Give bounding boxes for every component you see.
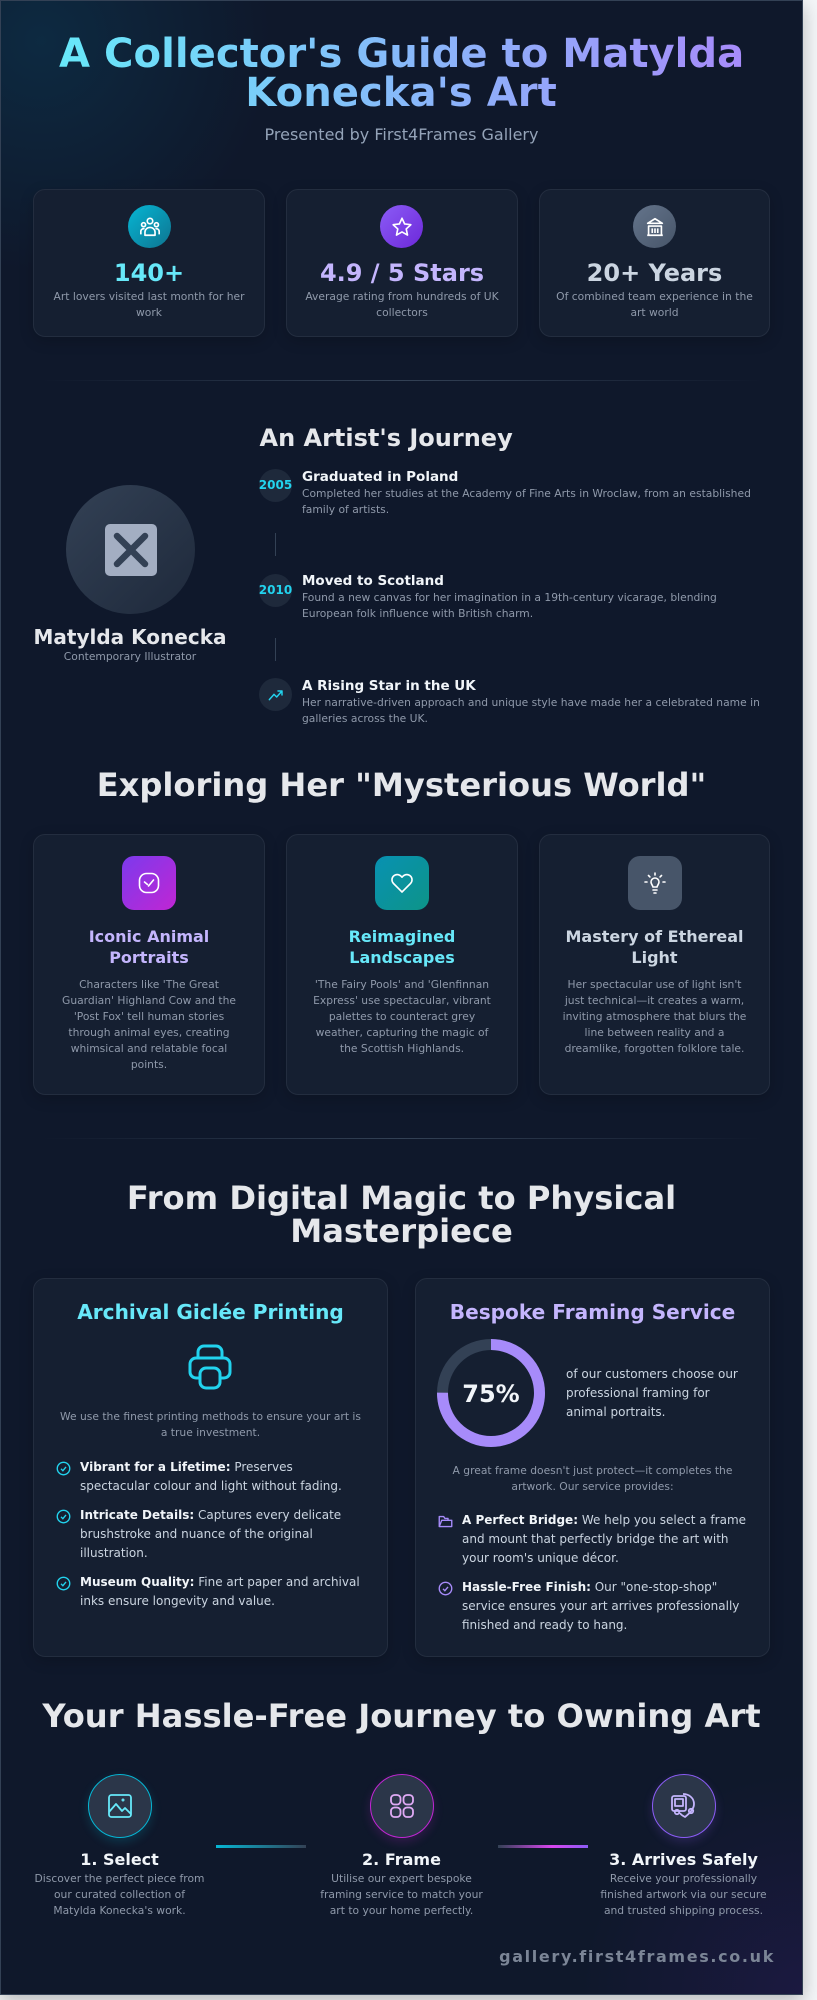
feature title: Iconic Animal <box>89 926 209 946</box>
step icon: grid <box>370 1774 434 1838</box>
event text: Found a new canvas for her imagination in a 19th-century vicarage, blending <box>302 591 717 604</box>
feature text: inviting atmosphere that blurs the <box>563 1010 746 1023</box>
footer url: gallery.first4frames.co.uk <box>499 1947 775 1966</box>
icon: people <box>128 205 171 248</box>
feature text <box>313 978 491 1055</box>
donut caption: of our customers choose our <box>566 1367 738 1381</box>
stat description: Of combined team experience in the <box>556 290 753 303</box>
feature text: whimsical and relatable focal <box>71 1042 227 1055</box>
stat value: 140+ <box>114 259 184 287</box>
list item: finish <box>438 1580 739 1632</box>
feature text: Characters like 'The Great <box>79 978 219 991</box>
event title: Moved to Scotland <box>302 573 444 589</box>
year 2010: 2010 <box>259 583 292 597</box>
icon: star <box>380 205 423 248</box>
list text <box>462 1580 739 1632</box>
connector 2 <box>498 1845 588 1848</box>
stat description: art world <box>630 306 679 319</box>
icon: bulb <box>628 856 682 910</box>
year 2005: 2005 <box>259 478 292 492</box>
artist portrait placeholder <box>66 485 195 614</box>
list text <box>80 1460 342 1493</box>
list text: finished and ready to hang. <box>462 1618 627 1632</box>
list text: A Perfect Bridge: We help you select a frame <box>462 1513 746 1527</box>
list item: details <box>56 1508 341 1560</box>
feature text: 'Post Fox' tell human stories <box>74 1010 224 1023</box>
feature text: Her spectacular use of light isn't <box>568 978 741 991</box>
panel intro: We use the finest printing methods to ensure your art is <box>60 1410 361 1423</box>
feature title: Mastery of Ethereal <box>566 926 744 946</box>
artist role: Contemporary Illustrator <box>64 650 196 663</box>
list text: Hassle-Free Finish: Our "one-stop-shop" <box>462 1580 717 1594</box>
stat description: Average rating from hundreds of UK <box>305 290 499 303</box>
donut caption: professional framing for <box>566 1386 710 1400</box>
title: A Collector's Guide to Matylda <box>59 31 744 77</box>
panel: framing service <box>415 1278 770 1657</box>
event text <box>302 487 751 516</box>
heading: digital to physical <box>127 1179 676 1250</box>
stat description <box>54 290 244 319</box>
step text: framing service to match your <box>320 1888 483 1901</box>
title <box>59 35 743 113</box>
stat card: rating <box>286 189 518 337</box>
feature card: animal portraits <box>33 834 265 1095</box>
timeline item rising star <box>259 678 760 725</box>
stat value: 20+ Years <box>587 259 722 287</box>
heading: mysterious world: Exploring Her "Mysterious World" <box>97 766 706 804</box>
panel intro: A great frame doesn't just protect—it completes the <box>453 1464 732 1477</box>
stat value: 4.9 / 5 Stars <box>320 259 484 287</box>
step text: Matylda Konecka's work. <box>53 1904 186 1917</box>
list item: bridge <box>438 1513 746 1565</box>
list item: vibrant <box>56 1460 342 1493</box>
feature text: Guardian' Highland Cow and the <box>62 994 236 1007</box>
connector 1 <box>216 1845 306 1848</box>
timeline item 2010 <box>259 573 717 620</box>
stat description <box>556 290 753 319</box>
stat card: visitors <box>33 189 265 337</box>
feature title: Landscapes <box>349 948 455 966</box>
list text: illustration. <box>80 1546 148 1560</box>
step 2 <box>320 1774 483 1917</box>
step text: and trusted shipping process. <box>604 1904 763 1917</box>
feature title: Reimagined <box>349 926 455 946</box>
heading: digital to physical: Masterpiece <box>290 1212 513 1250</box>
donut chart 75%: 75% <box>462 1380 520 1408</box>
step text: Receive your professionally <box>610 1872 757 1885</box>
feature text: through animal eyes, creating <box>68 1026 230 1039</box>
step text <box>320 1872 483 1917</box>
feature text: palettes to counteract grey <box>329 1010 475 1023</box>
marker 2010 <box>259 574 292 607</box>
stat description <box>305 290 499 319</box>
step icon: shipping <box>652 1774 716 1838</box>
feature title <box>349 926 455 966</box>
panel: giclee printing <box>33 1278 388 1657</box>
donut chart 75% <box>437 1339 545 1447</box>
list text: brushstroke and nuance of the original <box>80 1527 313 1541</box>
list text: Museum Quality: Fine art paper and archival <box>80 1575 360 1589</box>
list text <box>80 1575 360 1608</box>
step text: art to your home perfectly. <box>330 1904 473 1917</box>
step title: 3. Arrives Safely <box>609 1850 758 1869</box>
event text: Her narrative-driven approach and unique style have made her a celebrated name in <box>302 696 760 709</box>
donut caption: animal portraits. <box>566 1405 665 1419</box>
panel intro: a true investment. <box>161 1426 260 1439</box>
event title: Graduated in Poland <box>302 469 458 485</box>
step text: our curated collection of <box>54 1888 185 1901</box>
list text: and mount that perfectly bridge the art with <box>462 1532 729 1546</box>
stat description: work <box>136 306 162 319</box>
panel title: Archival Giclée Printing <box>77 1300 344 1324</box>
event text: galleries across the UK. <box>302 712 428 725</box>
step text: Utilise our expert bespoke <box>331 1872 472 1885</box>
list text <box>462 1513 746 1565</box>
feature title: Light <box>631 948 678 966</box>
step text <box>584 1871 783 1919</box>
feature text: line between reality and a <box>585 1026 724 1039</box>
list text: Intricate Details: Captures every delicate <box>80 1508 341 1522</box>
feature text: the Scottish Highlands. <box>340 1042 464 1055</box>
feature card: light <box>539 834 770 1095</box>
event text: European folk influence with British charm. <box>302 607 533 620</box>
event text <box>302 591 717 620</box>
list text: inks ensure longevity and value. <box>80 1594 275 1608</box>
step title: 1. Select <box>80 1850 159 1869</box>
check icon <box>56 1510 70 1524</box>
heading: digital to physical: From Digital Magic to Physical <box>127 1179 676 1217</box>
feature text <box>563 978 746 1055</box>
feature text: just technical—it creates a warm, <box>565 994 744 1007</box>
feature text: weather, capturing the magic of <box>316 1026 488 1039</box>
list item: quality <box>56 1575 360 1608</box>
feature text: Express' use spectacular, vibrant <box>313 994 491 1007</box>
list text <box>80 1508 341 1560</box>
icon: printer <box>188 1344 232 1390</box>
feature text: dreamlike, forgotten folklore tale. <box>565 1042 744 1055</box>
artist name: Matylda Konecka <box>34 625 226 649</box>
list text: service ensures your art arrives professionally <box>462 1599 739 1613</box>
subtitle: Presented by First4Frames Gallery <box>265 125 538 144</box>
stat description: collectors <box>376 306 428 319</box>
check icon <box>438 1582 452 1596</box>
panel intro: artwork. Our service provides: <box>511 1480 674 1493</box>
heading: journey: An Artist's Journey <box>260 424 513 452</box>
panel intro <box>452 1464 732 1493</box>
list text: your room's unique décor. <box>462 1551 619 1565</box>
event text: Completed her studies at the Academy of Fine Arts in Wroclaw, from an established <box>302 487 751 500</box>
step 1 <box>35 1774 204 1917</box>
icon: heart <box>375 856 429 910</box>
stat card: experience <box>539 189 770 337</box>
marker trend icon <box>259 678 292 711</box>
event text <box>302 696 760 725</box>
feature card: landscapes <box>286 834 518 1095</box>
panel intro <box>60 1410 361 1439</box>
stat description: Art lovers visited last month for her <box>54 290 244 303</box>
timeline item 2005 <box>259 469 751 516</box>
check icon <box>56 1462 70 1476</box>
step icon: image <box>88 1774 152 1838</box>
icon: museum <box>633 205 676 248</box>
check icon <box>56 1576 70 1590</box>
step 3 <box>584 1774 784 1920</box>
event title: A Rising Star in the UK <box>302 678 476 694</box>
feature title: Portraits <box>109 948 189 966</box>
list text: Vibrant for a Lifetime: Preserves <box>80 1460 293 1474</box>
step text: finished artwork via our secure <box>600 1888 767 1901</box>
donut caption <box>566 1367 738 1419</box>
event text: family of artists. <box>302 503 389 516</box>
step text: Discover the perfect piece from <box>35 1872 204 1885</box>
heading: hassle-free journey: Your Hassle-Free Journey to Owning Art <box>42 1697 761 1735</box>
step title: 2. Frame <box>362 1850 441 1869</box>
folder icon <box>438 1516 452 1528</box>
icon: face <box>122 856 176 910</box>
panel title: Bespoke Framing Service <box>450 1300 735 1324</box>
step text <box>35 1872 204 1917</box>
feature text: 'The Fairy Pools' and 'Glenfinnan <box>315 978 489 991</box>
feature title <box>89 926 209 966</box>
feature text: points. <box>131 1058 167 1071</box>
feature text <box>62 978 236 1071</box>
title: Konecka's Art <box>245 70 557 116</box>
list text: spectacular colour and light without fading. <box>80 1479 342 1493</box>
marker 2005 <box>259 469 292 502</box>
feature title <box>566 926 744 966</box>
